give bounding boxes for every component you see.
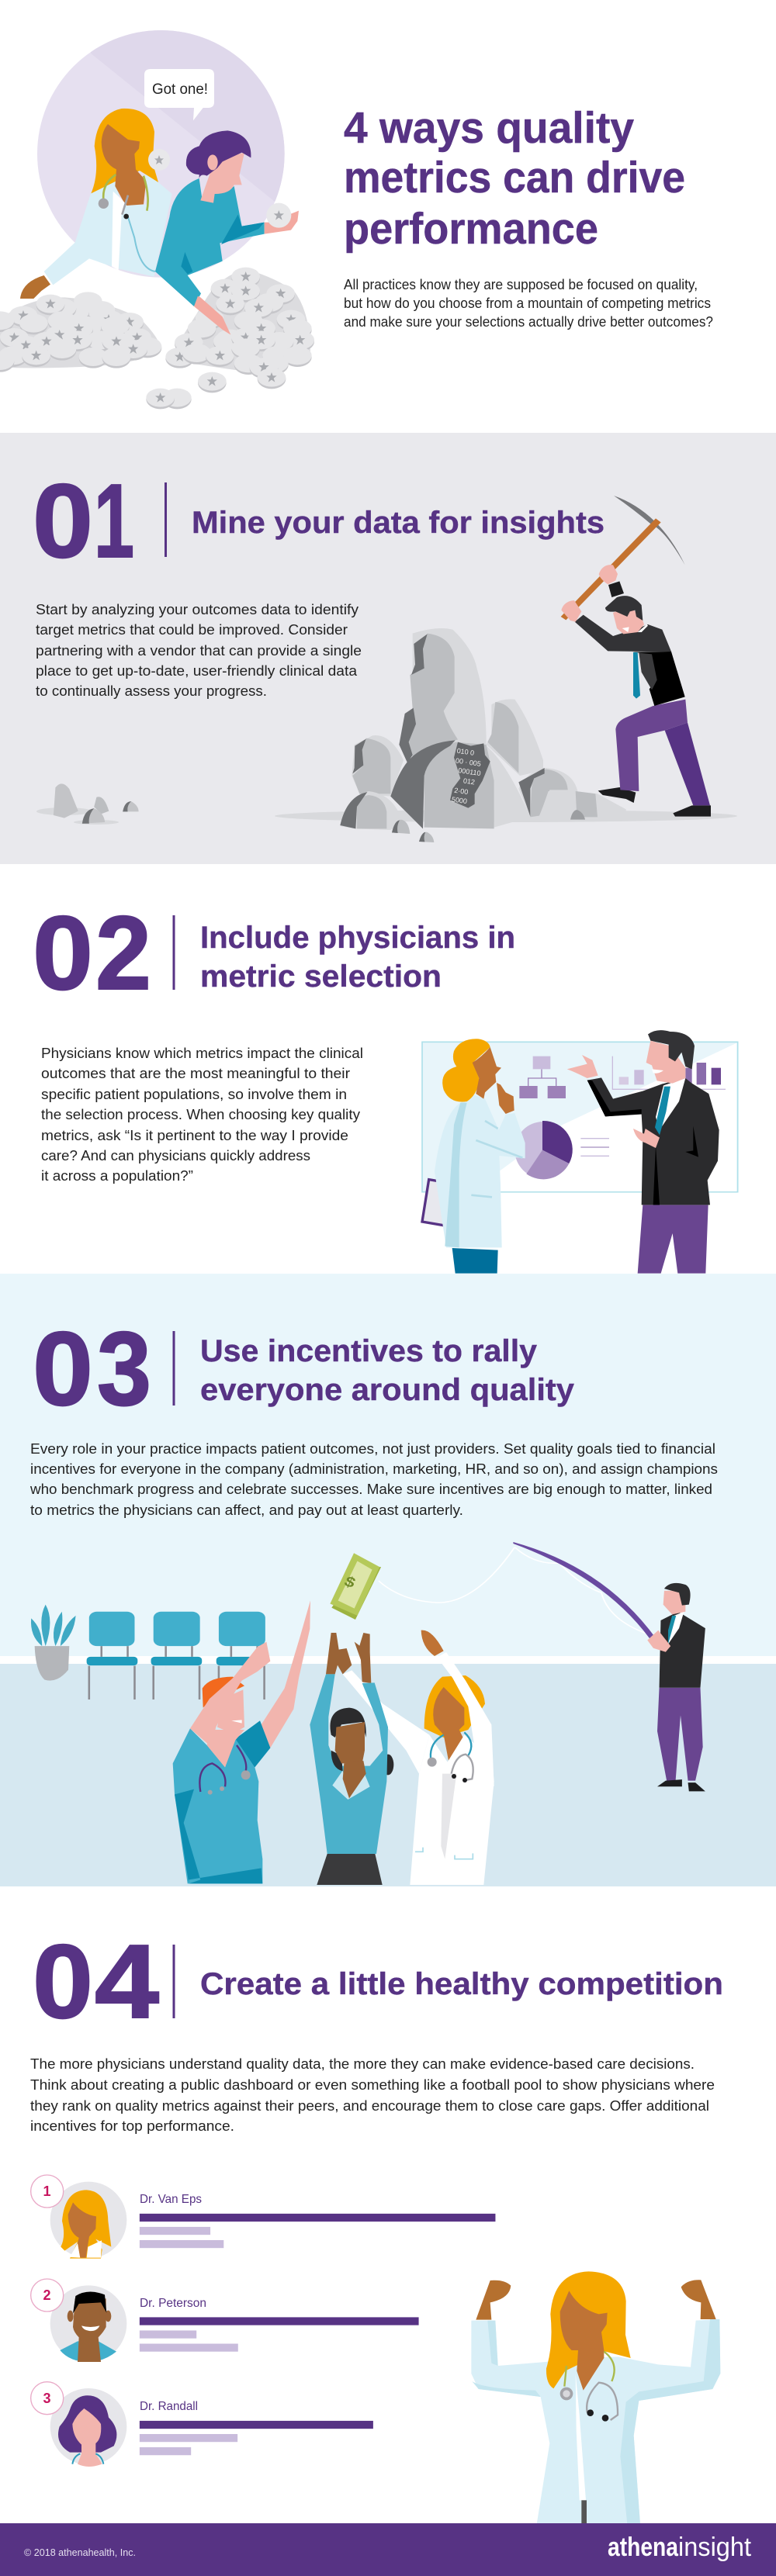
body text: incentives for top performance.: [30, 2118, 234, 2134]
avatar 3: [50, 2388, 126, 2467]
data vein with binary digits: 5000: [451, 795, 468, 805]
number 04: 0: [33, 1923, 93, 2040]
footer: [0, 2523, 776, 2576]
speech bubble: [144, 69, 214, 120]
pickaxe: [561, 496, 685, 620]
miner figure: [561, 565, 711, 817]
heading: Mine your data for insights: [192, 506, 605, 540]
body text: they rank on quality metrics against their peers, and encourage them to close care gaps. Offer additional: [30, 2097, 709, 2114]
avatar 1: [50, 2182, 126, 2259]
woman in teal with arms raised: [310, 1633, 393, 1885]
data vein with binary digits: 2·00: [454, 787, 469, 796]
illustration: doctor flexing: [471, 2271, 720, 2524]
body text: [30, 2056, 715, 2134]
metric bars: [140, 2214, 495, 2455]
body text: metrics, ask “Is it pertinent to the way I provide: [41, 1127, 348, 1143]
number 02: [33, 894, 151, 1011]
flat stone under foot: [539, 791, 626, 820]
foreground rocks: [340, 791, 434, 842]
body text: to metrics the physicians can affect, and pay out at least quarterly.: [30, 1502, 463, 1518]
purple circle backdrop: [36, 29, 289, 279]
heading: Use incentives to rally: [200, 1334, 538, 1368]
tall rock: [399, 628, 487, 762]
physician names: [140, 2193, 206, 2413]
divider: [165, 482, 167, 557]
avatar 2: [50, 2285, 126, 2362]
rank numbers: 1: [43, 2184, 51, 2199]
body text: specific patient populations, so involve them in: [41, 1086, 347, 1102]
illustration: waiting room, rod and fisherman: [31, 1542, 705, 1791]
title: 4 ways quality: [344, 103, 634, 153]
logo: insight: [678, 2533, 752, 2562]
body text: Physicians know which metrics impact the clinical: [41, 1045, 363, 1061]
logo: athena: [608, 2533, 679, 2562]
body text: The more physicians understand quality data, the more they can make evidence-based care decisions.: [30, 2056, 695, 2072]
fishing line: [379, 1547, 649, 1634]
doctor with orange hair: [20, 109, 172, 299]
org chart: [519, 1056, 566, 1098]
heading: Include physicians in: [200, 921, 515, 955]
coin piles: [0, 268, 314, 409]
physician names: Dr. Van Eps: [140, 2193, 202, 2206]
data vein with binary digits: 000110: [458, 766, 481, 777]
number 04: 4: [95, 1923, 159, 2040]
body text: place to get up-to-date, user-friendly clinical data: [36, 662, 358, 679]
body text: incentives for everyone in the company (administration, marketing, HR, and so on), and assign champions: [30, 1461, 718, 1477]
copyright: © 2018 athenahealth, Inc.: [24, 2547, 136, 2558]
heading: [200, 1334, 575, 1407]
avatars and rank badges: [31, 2175, 126, 2467]
plant: [31, 1605, 76, 1681]
divider: [172, 915, 175, 990]
leaderboard: [31, 2175, 495, 2467]
clipboard: [422, 1180, 449, 1226]
left rock: [352, 735, 404, 797]
nurse: [173, 1600, 310, 1883]
fisherman: [647, 1583, 705, 1791]
body text: care? And can physicians quickly address: [41, 1147, 310, 1164]
panel: 02 include physicians: [0, 864, 776, 1274]
intro text: and make sure your selections actually drive better outcomes?: [344, 313, 713, 330]
chairs: [87, 1612, 267, 1699]
executive: [567, 1030, 719, 1274]
body text: partnering with a vendor that can provide a single: [36, 642, 362, 659]
panel: 01 mine your data: [0, 433, 776, 864]
illustration: rock formation: [340, 628, 578, 842]
number 03: [33, 1310, 151, 1427]
heading: Create a little healthy competition: [200, 1967, 723, 2001]
body text: outcomes that are the most meaningful to their: [41, 1065, 350, 1081]
number 04: [33, 1923, 159, 2040]
body text: Think about creating a public dashboard or even something like a football pool to show physicians where: [30, 2076, 715, 2093]
ground shadows: [36, 807, 737, 825]
panel: 03 use incentives: [0, 1274, 776, 1886]
body text: Start by analyzing your outcomes data to identify: [36, 601, 359, 617]
body text: to continually assess your progress.: [36, 683, 267, 699]
intro text: All practices know they are supposed be focused on quality,: [344, 276, 698, 292]
fishing rod: [513, 1542, 656, 1638]
body text: [29, 1440, 718, 1518]
divider: [172, 1331, 175, 1406]
rank numbers: [43, 2184, 51, 2406]
right rock: [487, 699, 543, 776]
data vein with binary digits: 00 · 005: [455, 756, 481, 768]
rank numbers: 3: [43, 2391, 51, 2406]
panel: 04 healthy competition: [0, 1886, 776, 2524]
body text: [41, 1045, 363, 1184]
dollar bill: $: [342, 1574, 359, 1591]
intro text: [344, 276, 713, 330]
divider: [172, 1945, 175, 2018]
coin held up by doctor: [148, 149, 170, 171]
title: performance: [344, 204, 598, 254]
doctor: [435, 1039, 525, 1274]
physician names: Dr. Peterson: [140, 2297, 206, 2310]
badges: [31, 2175, 64, 2415]
bar chart: [612, 1056, 726, 1089]
rank numbers: 2: [43, 2287, 51, 2303]
woman in teal with purple hair: [155, 130, 299, 335]
body text: Every role in your practice impacts patient outcomes, not just providers. Set quality goals tied to financial: [30, 1440, 715, 1457]
logo: [608, 2533, 752, 2562]
data vein with binary digits: [450, 742, 490, 808]
heading: metric selection: [200, 960, 442, 994]
body text: the selection process. When choosing key quality: [41, 1106, 361, 1122]
illustration: doctor and executive at board: [422, 1030, 738, 1274]
small rocks left: [54, 783, 139, 824]
heading: everyone around quality: [200, 1373, 575, 1407]
small right rock: [518, 768, 578, 817]
body text: who benchmark progress and celebrate successes. Make sure incentives are big enough to matter, linked: [29, 1481, 712, 1497]
central rock: [390, 740, 530, 828]
pie chart: [514, 1121, 573, 1179]
illustration: staff reaching for the bill: [173, 1600, 494, 1885]
intro text: but how do you choose from a mountain of competing metrics: [344, 295, 711, 311]
data vein with binary digits: 012: [462, 776, 476, 786]
number 01: [33, 462, 134, 579]
legend lines: [580, 1139, 609, 1156]
number 03: 0: [33, 1310, 93, 1427]
illustration: miner with pickaxe: [539, 496, 711, 820]
number 01: 1: [94, 462, 134, 579]
heading: [200, 921, 515, 994]
dollar bill: [330, 1553, 381, 1620]
title: metrics can drive: [344, 153, 685, 202]
number 02: 2: [95, 894, 151, 1011]
body text: target metrics that could be improved. Consider: [36, 621, 348, 638]
doctor's far arm: [343, 1670, 429, 1774]
body text: it across a population?”: [41, 1167, 193, 1184]
body text: [36, 601, 362, 699]
physician names: Dr. Randall: [140, 2400, 198, 2413]
data vein with binary digits: 010 0: [456, 747, 475, 757]
number 03: 3: [97, 1310, 151, 1427]
panel: intro: [0, 30, 712, 410]
doctor in white coat: [410, 1630, 494, 1885]
speech text: Got one!: [152, 81, 208, 98]
whiteboard: [422, 1042, 738, 1192]
illustration: two clinicians picking metric coins: [0, 29, 314, 409]
title: [344, 103, 685, 254]
number 01: 0: [33, 462, 93, 579]
coin in hand: [266, 203, 291, 228]
number 02: 0: [33, 894, 93, 1011]
